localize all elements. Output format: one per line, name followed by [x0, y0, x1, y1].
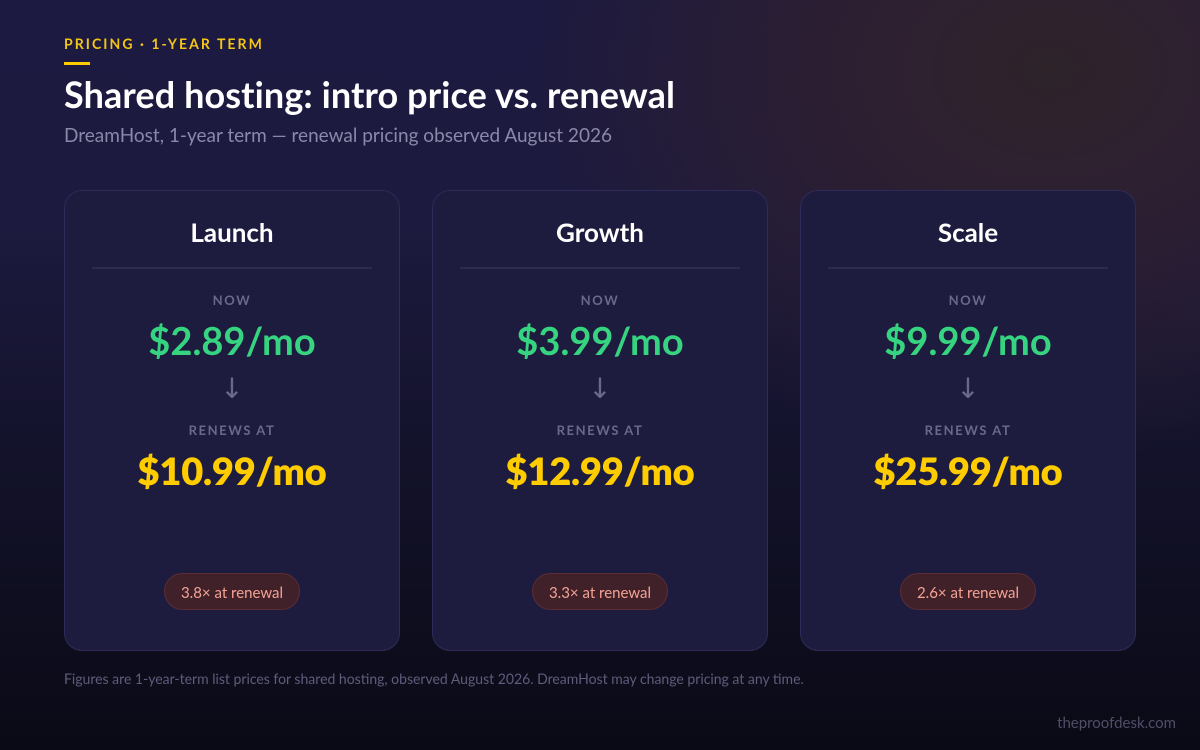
- footnote: Figures are 1-year-term list prices for shared hosting, observed August 2026. DreamHost may change pricing at any time.: [64, 670, 804, 687]
- now label: NOW: [213, 292, 251, 308]
- plan name: Launch: [190, 216, 274, 248]
- renews label: RENEWS AT: [557, 422, 643, 438]
- watermark: theproofdesk.com: [1057, 714, 1176, 732]
- renews label: RENEWS AT: [925, 422, 1011, 438]
- icon: down arrow: ↓: [588, 372, 612, 405]
- subtitle: DreamHost, 1-year term — renewal pricing observed August 2026: [64, 124, 612, 147]
- now label: NOW: [581, 292, 619, 308]
- panel: Growth: [432, 190, 768, 651]
- multiplier badge: [164, 573, 300, 610]
- multiplier badge: [532, 573, 668, 610]
- title: Shared hosting: intro price vs. renewal: [64, 72, 675, 116]
- accent bar: [64, 62, 90, 65]
- icon: down arrow: ↓: [956, 372, 980, 405]
- plan name: Scale: [938, 216, 998, 248]
- current price: $9.99/mo: [884, 318, 1052, 364]
- panel: Scale: [800, 190, 1136, 651]
- multiplier badge: 2.6× at renewal: [917, 584, 1019, 602]
- multiplier badge: 3.8× at renewal: [181, 584, 283, 602]
- renewal price: $10.99/mo: [138, 448, 326, 494]
- multiplier badge: [900, 573, 1036, 610]
- renews label: RENEWS AT: [189, 422, 275, 438]
- panel: Launch: [64, 190, 400, 651]
- icon: down arrow: ↓: [220, 372, 244, 405]
- eyebrow label: PRICING · 1-YEAR TERM: [64, 35, 264, 52]
- now label: NOW: [949, 292, 987, 308]
- current price: $2.89/mo: [148, 318, 316, 364]
- multiplier badge: 3.3× at renewal: [549, 584, 651, 602]
- renewal price: $12.99/mo: [506, 448, 694, 494]
- plan name: Growth: [556, 216, 644, 248]
- renewal price: $25.99/mo: [874, 448, 1062, 494]
- current price: $3.99/mo: [516, 318, 684, 364]
